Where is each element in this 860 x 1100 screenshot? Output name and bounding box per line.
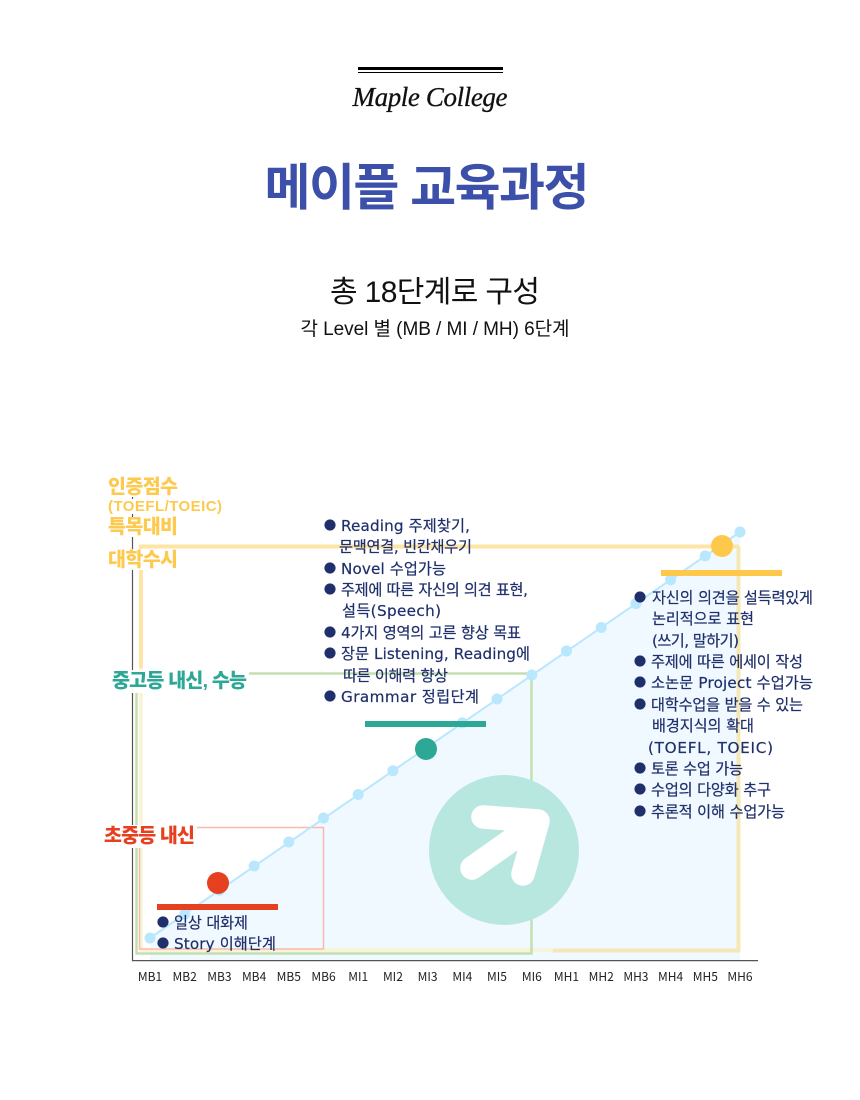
list: middle: [324, 517, 530, 706]
list: high: 배경지식의 확대: [652, 717, 754, 735]
label: TOEFL/TOEIC: (TOEFL/TOEIC): [108, 498, 222, 515]
list: high: 수업의 다양화 추구: [651, 781, 771, 799]
list: high: (쓰기, 말하기): [652, 632, 739, 650]
x-axis labels: MB2: [173, 968, 197, 985]
label: 대학수시: 대학수시: [108, 549, 178, 571]
list: middle: Grammar 정립단계: [341, 688, 479, 706]
growth line points: [144, 526, 746, 944]
subtitle: 총 18단계로 구성: [330, 276, 540, 309]
label: 특목대비: 특목대비: [108, 516, 178, 538]
list: middle: Novel 수업가능: [341, 560, 446, 578]
x-axis labels: MH1: [554, 968, 579, 985]
list: high: (TOEFL, TOEIC): [648, 739, 773, 757]
list: middle: 문맥연결, 빈칸채우기: [339, 538, 472, 556]
x-axis labels: MH3: [623, 968, 648, 985]
x-axis labels: MB6: [311, 968, 336, 985]
list: high: 대학수업을 받을 수 있는: [651, 696, 803, 714]
list: middle: 따른 이해력 향상: [343, 667, 448, 685]
x-axis labels: MI5: [487, 968, 507, 985]
header rule and brand: Maple College: [352, 82, 508, 112]
marker: elementary level: [157, 872, 278, 910]
marker: middle level: [365, 721, 486, 760]
x-axis labels: MB4: [242, 968, 267, 985]
x-axis labels: MI3: [418, 968, 438, 985]
label: 중고등 내신, 수능: 중고등 내신, 수능: [112, 670, 247, 692]
area under growth line: [150, 532, 740, 960]
list: elementary: Story 이해단계: [174, 935, 276, 953]
x-axis labels: MI2: [383, 968, 403, 985]
x-axis labels: [138, 968, 753, 985]
list: elementary: 일상 대화제: [174, 914, 248, 932]
list: middle: 장문 Listening, Reading에: [341, 645, 530, 663]
marker: high level: [661, 535, 782, 576]
x-axis labels: MI6: [522, 968, 542, 985]
green range box: [136, 674, 532, 954]
list: high: [634, 589, 813, 821]
x-axis labels: MB5: [277, 968, 301, 985]
y axis: [132, 497, 134, 961]
list: middle: 4가지 영역의 고른 향상 목표: [341, 624, 521, 642]
x axis: [132, 960, 758, 962]
list: high: 추론적 이해 수업가능: [651, 803, 785, 821]
list: elementary: [158, 914, 276, 953]
label: 인증점수: 인증점수: [108, 476, 178, 498]
x-axis labels: MH6: [727, 968, 753, 985]
subtitle: 각 Level 별 (MB / MI / MH) 6단계: [300, 318, 570, 340]
growth line: [150, 532, 740, 938]
list: high: 주제에 따른 에세이 작성: [651, 653, 803, 671]
x-axis labels: MH5: [693, 968, 718, 985]
list: high: 토론 수업 가능: [651, 760, 743, 778]
list: middle: 주제에 따른 자신의 의견 표현,: [341, 581, 528, 599]
header rule and brand: [352, 67, 508, 112]
x-axis labels: MI1: [348, 968, 368, 985]
yellow range box: [141, 546, 739, 950]
list: middle: Reading 주제찾기,: [341, 517, 470, 535]
x-axis labels: MB3: [207, 968, 232, 985]
x-axis labels: MH2: [589, 968, 614, 985]
list: high: 소논문 Project 수업가능: [651, 674, 813, 692]
title: 메이플 교육과정: [264, 160, 590, 216]
x-axis labels: MB1: [138, 968, 162, 985]
chart: [132, 497, 758, 961]
icon: arrow circle: [429, 775, 579, 925]
list: high: 논리적으로 표현: [652, 610, 754, 628]
y-axis labels: [102, 476, 249, 848]
x-axis labels: MI4: [452, 968, 473, 985]
subtitle: [300, 276, 570, 340]
red range box: [140, 828, 324, 949]
label: 초중등 내신: 초중등 내신: [104, 825, 195, 847]
list: high: 자신의 의견을 설득력있게: [652, 589, 813, 607]
list: middle: 설득(Speech): [342, 602, 441, 620]
x-axis labels: MH4: [658, 968, 684, 985]
